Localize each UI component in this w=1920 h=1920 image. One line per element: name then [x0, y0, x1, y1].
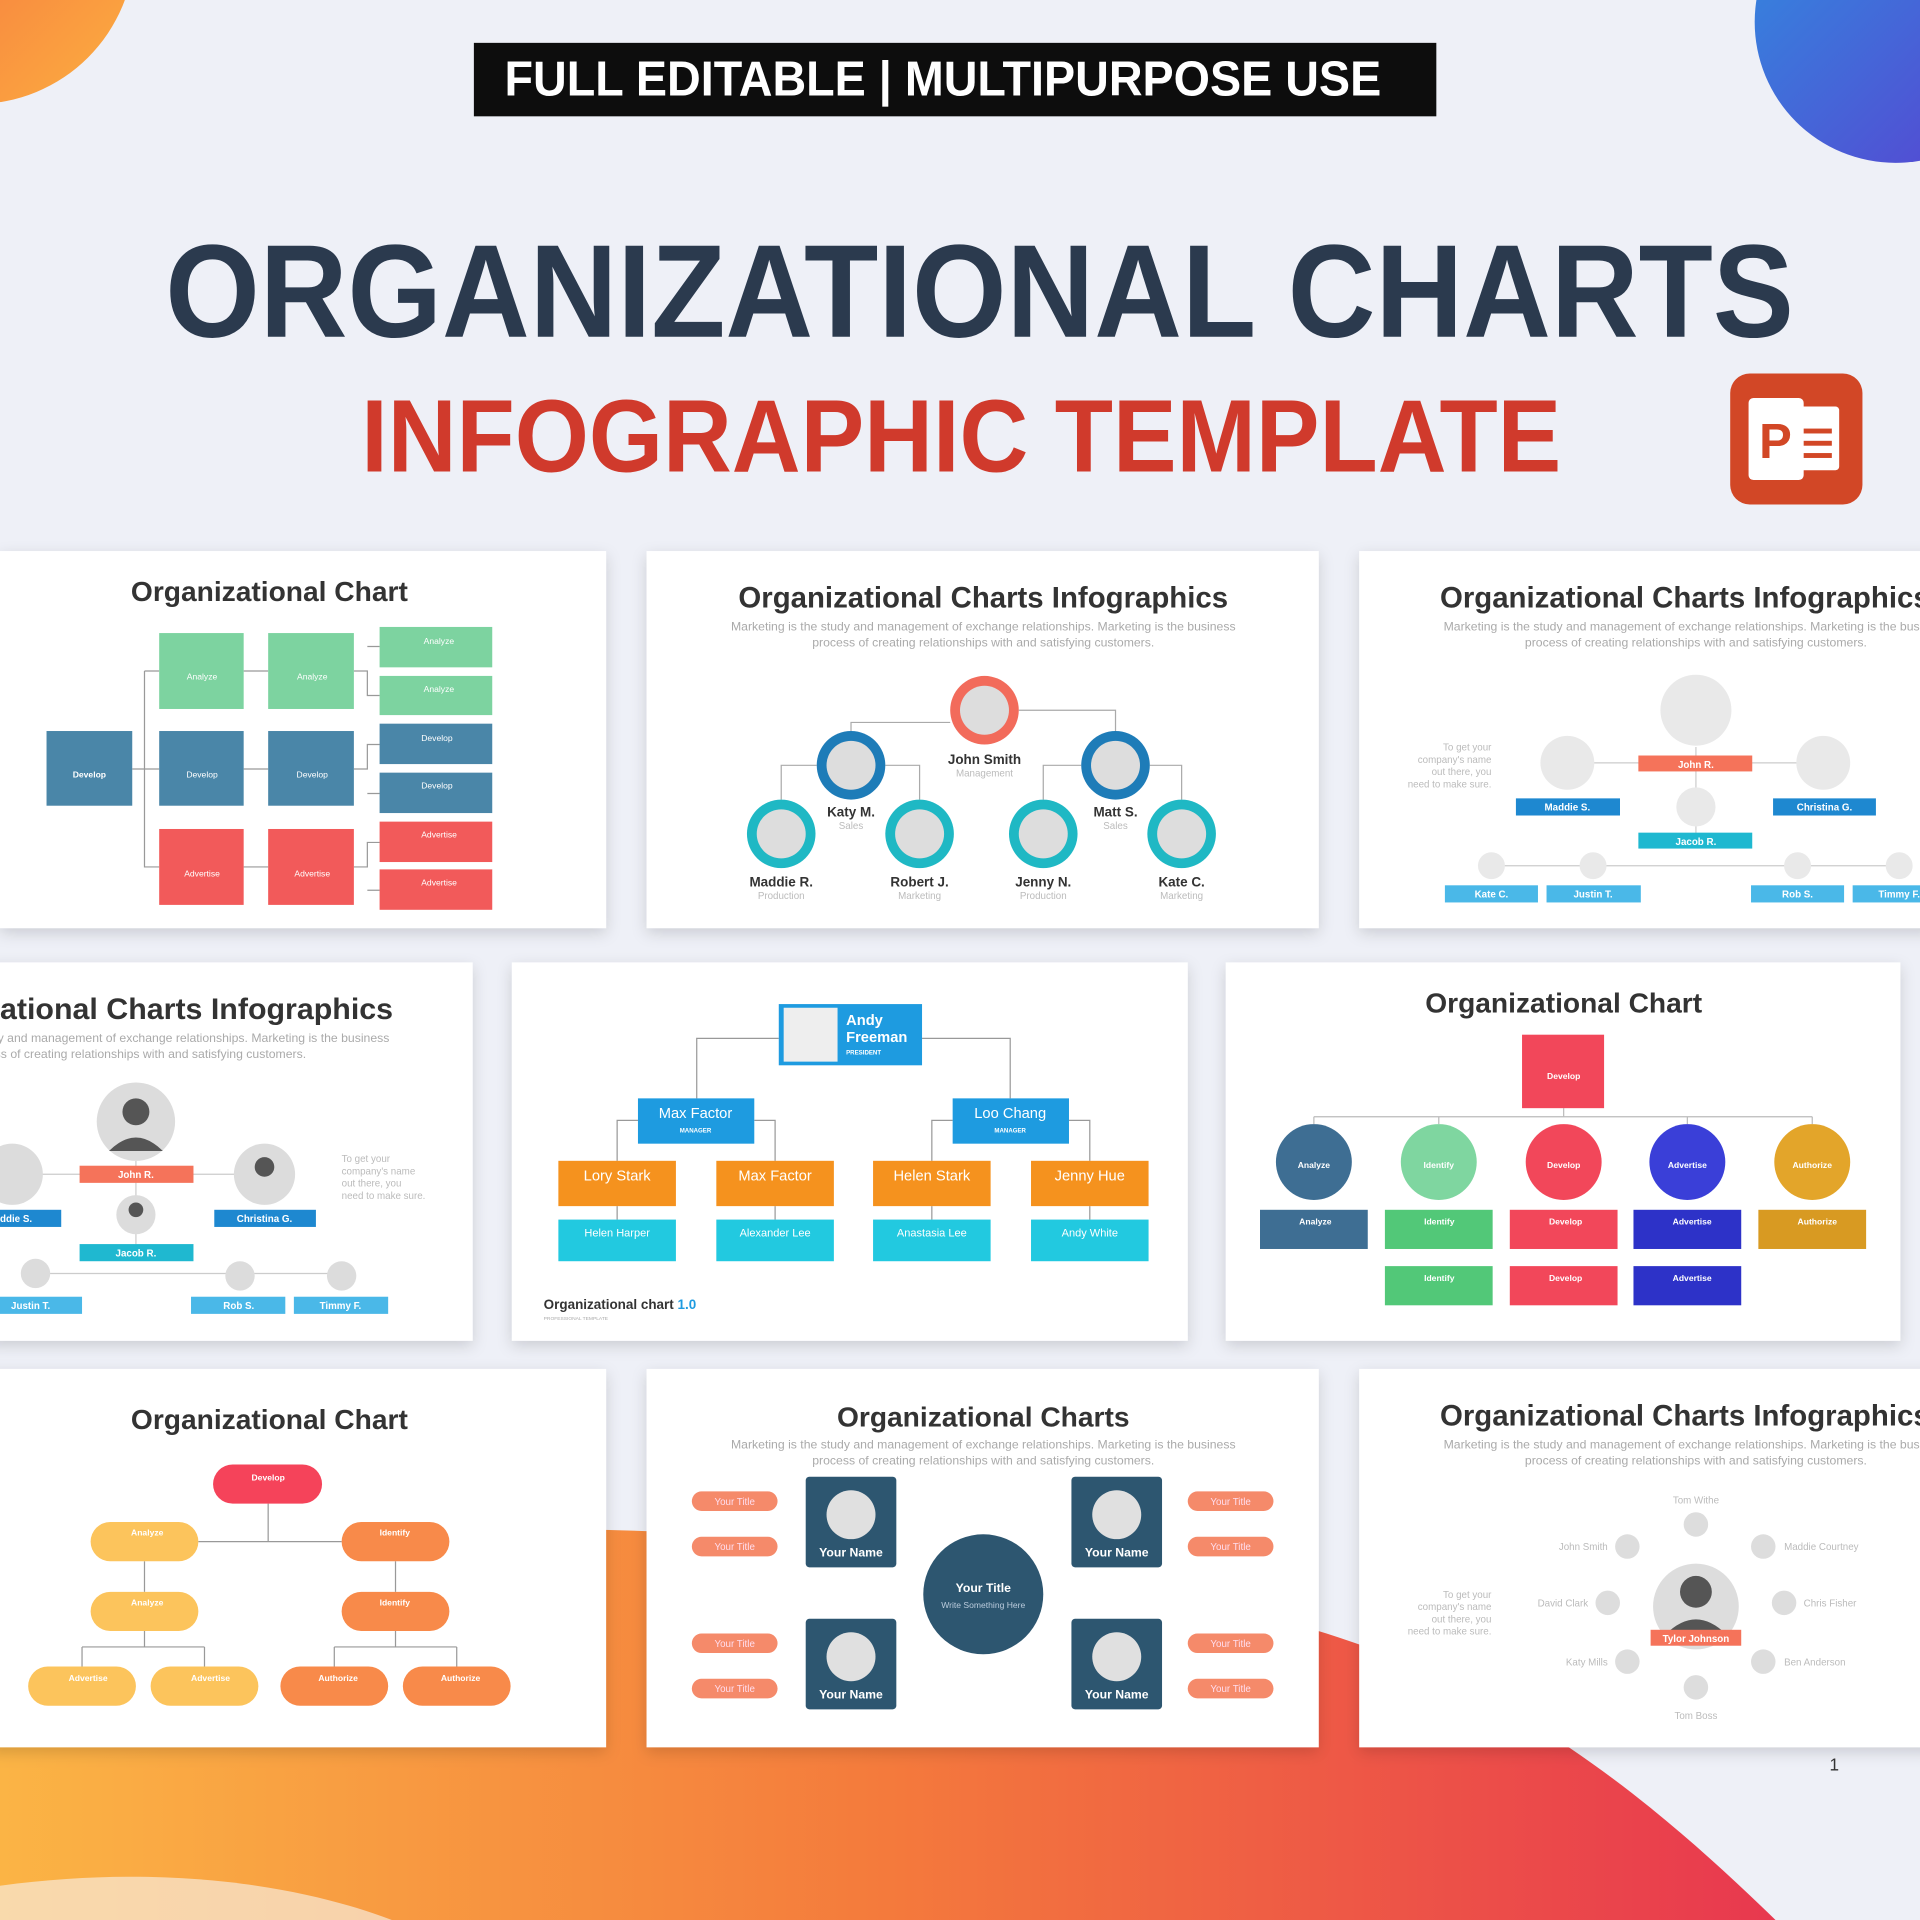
- panel: slide B circle org chart: Management: [956, 768, 1013, 779]
- decorative corner circle top-right: [1755, 0, 1920, 163]
- panel: slide H name boxes: [647, 1369, 1319, 1747]
- panel: slide B circle org chart: Kate C.: [1158, 875, 1205, 890]
- panel: slide H name boxes: process of creating relationships with and satisfying customers.: [812, 1453, 1154, 1467]
- page number: 1: [1830, 1755, 1839, 1775]
- panel: slide B circle org chart: Sales: [839, 821, 863, 832]
- panel: slide C gray avatar org chart: Timmy F.: [1878, 890, 1920, 901]
- panel: slide C gray avatar org chart: John R.: [1678, 760, 1714, 771]
- panel: slide E box hierarchy: Anastasia Lee: [897, 1228, 967, 1240]
- panel: slide A org chart blocks: Develop: [297, 770, 328, 780]
- panel: slide G pill chart: Analyze: [131, 1597, 164, 1607]
- panel: slide E box hierarchy: Jenny Hue: [1055, 1168, 1125, 1184]
- panel: slide D photo org chart: [0, 962, 473, 1341]
- icon: powerpoint: [1730, 373, 1862, 504]
- panel: slide B circle org chart: Marketing: [1160, 891, 1203, 902]
- panel: slide G pill chart: Authorize: [441, 1673, 481, 1683]
- panel: slide E box hierarchy: MANAGER: [680, 1128, 712, 1135]
- panel: slide I radial chart: company's name: [1418, 1602, 1491, 1613]
- panel: slide I radial chart: Ben Anderson: [1784, 1657, 1846, 1668]
- panel: slide B circle org chart: [647, 551, 1319, 928]
- panel: slide D photo org chart: Justin T.: [11, 1301, 50, 1312]
- panel: slide E box hierarchy: Max Factor: [738, 1168, 812, 1184]
- panel: slide I radial chart: Tylor Johnson: [1663, 1634, 1729, 1645]
- panel: slide I radial chart: [1359, 1369, 1920, 1747]
- panel: slide A org chart blocks: Develop: [73, 770, 106, 780]
- panel: slide B circle org chart: John Smith: [948, 752, 1021, 767]
- panel: slide E box hierarchy: Andy: [846, 1013, 884, 1029]
- panel: slide F colored circles chart: Develop: [1549, 1273, 1582, 1283]
- panel: slide E box hierarchy: [512, 962, 1188, 1341]
- panel: slide B circle org chart: Robert J.: [890, 875, 949, 890]
- banner: FULL EDITABLE | MULTIPURPOSE USE: [504, 53, 1381, 107]
- panel: slide A org chart blocks: Analyze: [424, 684, 454, 694]
- decorative corner circle top-left: [0, 0, 135, 104]
- panel: slide C gray avatar org chart: To get your: [1443, 743, 1492, 754]
- panel: slide E box hierarchy: MANAGER: [994, 1128, 1027, 1135]
- panel: slide B circle org chart: Marketing is the study and management of exchange relationships. Marketing is the business: [731, 620, 1236, 634]
- panel: slide E box hierarchy: Freeman: [846, 1030, 907, 1046]
- panel: slide I radial chart: need to make sure.: [1408, 1627, 1491, 1638]
- panel: slide E box hierarchy: Andy White: [1062, 1228, 1118, 1240]
- panel: slide E box hierarchy: PRESIDENT: [846, 1049, 881, 1056]
- panel: slide E box hierarchy: Loo Chang: [974, 1106, 1046, 1122]
- panel: slide B circle org chart: Jenny N.: [1015, 875, 1071, 890]
- panel: slide A org chart blocks: Advertise: [294, 869, 330, 879]
- panel: slide B circle org chart: Production: [1020, 891, 1067, 902]
- panel: slide H name boxes: Your Title: [956, 1581, 1011, 1595]
- panel: slide C gray avatar org chart: company's name: [1418, 755, 1491, 766]
- panel: slide H name boxes: Your Name: [819, 1545, 883, 1559]
- panel: slide H name boxes: Your Title: [714, 1684, 755, 1695]
- panel: slide E box hierarchy: Organizational chart 1.0: [544, 1297, 696, 1312]
- panel: slide E box hierarchy: Max Factor: [659, 1106, 732, 1122]
- panel: slide D photo org chart: Rob S.: [223, 1301, 255, 1312]
- panel: slide I radial chart: Tom Withe: [1673, 1496, 1719, 1507]
- panel: slide A org chart blocks: Analyze: [297, 672, 328, 682]
- panel: slide G pill chart: Develop: [252, 1472, 285, 1482]
- panel: slide H name boxes: Marketing is the study and management of exchange relationships. Marketing is the business: [731, 1438, 1236, 1452]
- panel: slide B circle org chart: Matt S.: [1093, 805, 1138, 820]
- panel: slide F colored circles chart: Analyze: [1298, 1160, 1330, 1170]
- panel: slide D photo org chart: Christina G.: [237, 1214, 292, 1225]
- bottom gradient wave: [0, 1529, 1776, 1920]
- panel: slide F colored circles chart: Authorize: [1793, 1160, 1832, 1170]
- panel: slide I radial chart: Katy Mills: [1566, 1657, 1608, 1668]
- panel: slide C gray avatar org chart: need to make sure.: [1408, 779, 1491, 790]
- title: ORGANIZATIONAL CHARTS: [165, 218, 1794, 366]
- panel: slide H name boxes: Your Title: [1210, 1639, 1251, 1650]
- panel: slide F colored circles chart: Identify: [1424, 1273, 1455, 1283]
- panel: slide H name boxes: Your Title: [714, 1542, 755, 1553]
- subtitle: INFOGRAPHIC TEMPLATE: [361, 378, 1561, 493]
- panel: slide C gray avatar org chart: out there, you: [1432, 767, 1491, 778]
- panel: slide D photo org chart: out there, you: [342, 1179, 401, 1190]
- panel: slide C gray avatar org chart: Maddie S.: [1545, 803, 1590, 814]
- panel: slide G pill chart: Advertise: [191, 1673, 230, 1683]
- panel: slide H name boxes: Your Name: [819, 1687, 883, 1701]
- panel: slide H name boxes: Write Something Here: [941, 1600, 1026, 1610]
- panel: slide H name boxes: Your Name: [1085, 1687, 1149, 1701]
- panel: slide C gray avatar org chart: Rob S.: [1782, 890, 1813, 901]
- panel: slide I radial chart: Maddie Courtney: [1784, 1542, 1859, 1553]
- panel: slide E box hierarchy: Lory Stark: [584, 1168, 651, 1184]
- panel: slide A org chart blocks: Develop: [186, 770, 218, 780]
- panel: slide F colored circles chart: Advertise: [1668, 1160, 1707, 1170]
- panel: slide A org chart blocks: Develop: [421, 781, 453, 791]
- panel: slide E box hierarchy: Helen Stark: [893, 1168, 971, 1184]
- panel: slide A org chart blocks: Analyze: [424, 636, 454, 646]
- panel: slide A org chart blocks: Advertise: [421, 830, 457, 840]
- panel: slide I radial chart: To get your: [1443, 1590, 1492, 1601]
- panel: slide D photo org chart: Timmy F.: [320, 1301, 362, 1312]
- panel: slide D photo org chart: company's name: [342, 1166, 415, 1177]
- panel: slide C gray avatar org chart: process of creating relationships with and satisfying customers.: [1525, 636, 1867, 650]
- panel: slide G pill chart: Authorize: [318, 1673, 358, 1683]
- panel: slide F colored circles chart: [1226, 962, 1900, 1341]
- panel: slide H name boxes: Your Name: [1085, 1545, 1149, 1559]
- panel: slide A org chart blocks: Advertise: [421, 877, 457, 887]
- panel: slide F colored circles chart: Develop: [1547, 1071, 1580, 1081]
- panel: slide F colored circles chart: Advertise: [1673, 1273, 1712, 1283]
- panel: slide F colored circles chart: Authorize: [1798, 1216, 1837, 1226]
- panel: slide C gray avatar org chart: Christina G.: [1797, 803, 1852, 814]
- panel: slide G pill chart: Organizational Chart: [131, 1404, 408, 1435]
- panel: slide I radial chart: out there, you: [1432, 1614, 1491, 1625]
- panel: slide I radial chart: Tom Boss: [1674, 1711, 1717, 1722]
- panel: slide D photo org chart: ddie S.: [0, 1214, 32, 1225]
- panel: slide A org chart blocks: Advertise: [184, 869, 220, 879]
- panel: slide B circle org chart: Production: [758, 891, 805, 902]
- panel: slide A org chart blocks: Analyze: [187, 672, 218, 682]
- panel: slide I radial chart: process of creating relationships with and satisfying customers.: [1525, 1453, 1867, 1467]
- panel: slide F colored circles chart: Analyze: [1299, 1216, 1332, 1226]
- panel: slide A org chart blocks: [0, 551, 606, 928]
- panel: slide C gray avatar org chart: Kate C.: [1475, 890, 1509, 901]
- panel: slide H name boxes: Your Title: [1210, 1497, 1251, 1508]
- panel: slide F colored circles chart: Identify: [1424, 1160, 1454, 1170]
- panel: slide F colored circles chart: Identify: [1424, 1216, 1455, 1226]
- panel: slide B circle org chart: process of creating relationships with and satisfying customers.: [812, 636, 1154, 650]
- panel: slide C gray avatar org chart: Justin T.: [1573, 890, 1613, 901]
- panel: slide B circle org chart: Organizational Charts Infographics: [738, 581, 1228, 614]
- panel: slide B circle org chart: Marketing: [898, 891, 941, 902]
- panel: slide I radial chart: David Clark: [1538, 1599, 1588, 1610]
- panel: slide I radial chart: Chris Fisher: [1804, 1599, 1857, 1610]
- panel: slide C gray avatar org chart: Organizational Charts Infographics: [1440, 581, 1920, 614]
- panel: slide B circle org chart: Katy M.: [827, 805, 875, 820]
- icon: powerpoint: P: [1759, 415, 1792, 469]
- panel: slide B circle org chart: Sales: [1103, 821, 1128, 832]
- panel: slide I radial chart: Organizational Charts Infographics: [1440, 1399, 1920, 1432]
- panel: slide E box hierarchy: Alexander Lee: [740, 1228, 811, 1240]
- panel: slide E box hierarchy: Helen Harper: [584, 1228, 650, 1240]
- panel: slide D photo org chart: Jacob R.: [116, 1248, 157, 1259]
- panel: slide G pill chart: [0, 1369, 606, 1747]
- panel: slide D photo org chart: John R.: [118, 1170, 154, 1181]
- panel: slide G pill chart: Identify: [380, 1528, 410, 1538]
- panel: slide D photo org chart: need to make sure.: [342, 1191, 425, 1202]
- panel: slide H name boxes: Your Title: [714, 1497, 755, 1508]
- panel: slide F colored circles chart: Develop: [1549, 1216, 1582, 1226]
- panel: slide F colored circles chart: Develop: [1547, 1160, 1580, 1170]
- panel: slide C gray avatar org chart: [1359, 551, 1920, 928]
- panel: slide F colored circles chart: Organizational Chart: [1425, 988, 1703, 1019]
- panel: slide H name boxes: Your Title: [1210, 1684, 1251, 1695]
- panel: slide G pill chart: Analyze: [131, 1528, 164, 1538]
- panel: slide G pill chart: Identify: [380, 1597, 410, 1607]
- panel: slide E box hierarchy: PROFESSIONAL TEMPLATE: [544, 1316, 609, 1322]
- panel: slide D photo org chart: To get your: [342, 1154, 391, 1165]
- panel: slide D photo org chart: ational Charts Infographics: [0, 993, 393, 1026]
- panel: slide G pill chart: Advertise: [69, 1673, 108, 1683]
- panel: slide B circle org chart: Maddie R.: [749, 875, 813, 890]
- panel: slide A org chart blocks: Develop: [421, 733, 453, 743]
- panel: slide H name boxes: Your Title: [714, 1639, 755, 1650]
- panel: slide H name boxes: Your Title: [1210, 1542, 1251, 1553]
- panel: slide I radial chart: John Smith: [1559, 1542, 1608, 1553]
- panel: slide F colored circles chart: Advertise: [1673, 1216, 1712, 1226]
- panel: slide C gray avatar org chart: Jacob R.: [1676, 837, 1717, 848]
- panel: slide H name boxes: Organizational Charts: [837, 1402, 1130, 1433]
- panel: slide A org chart blocks: Organizational Chart: [131, 576, 408, 607]
